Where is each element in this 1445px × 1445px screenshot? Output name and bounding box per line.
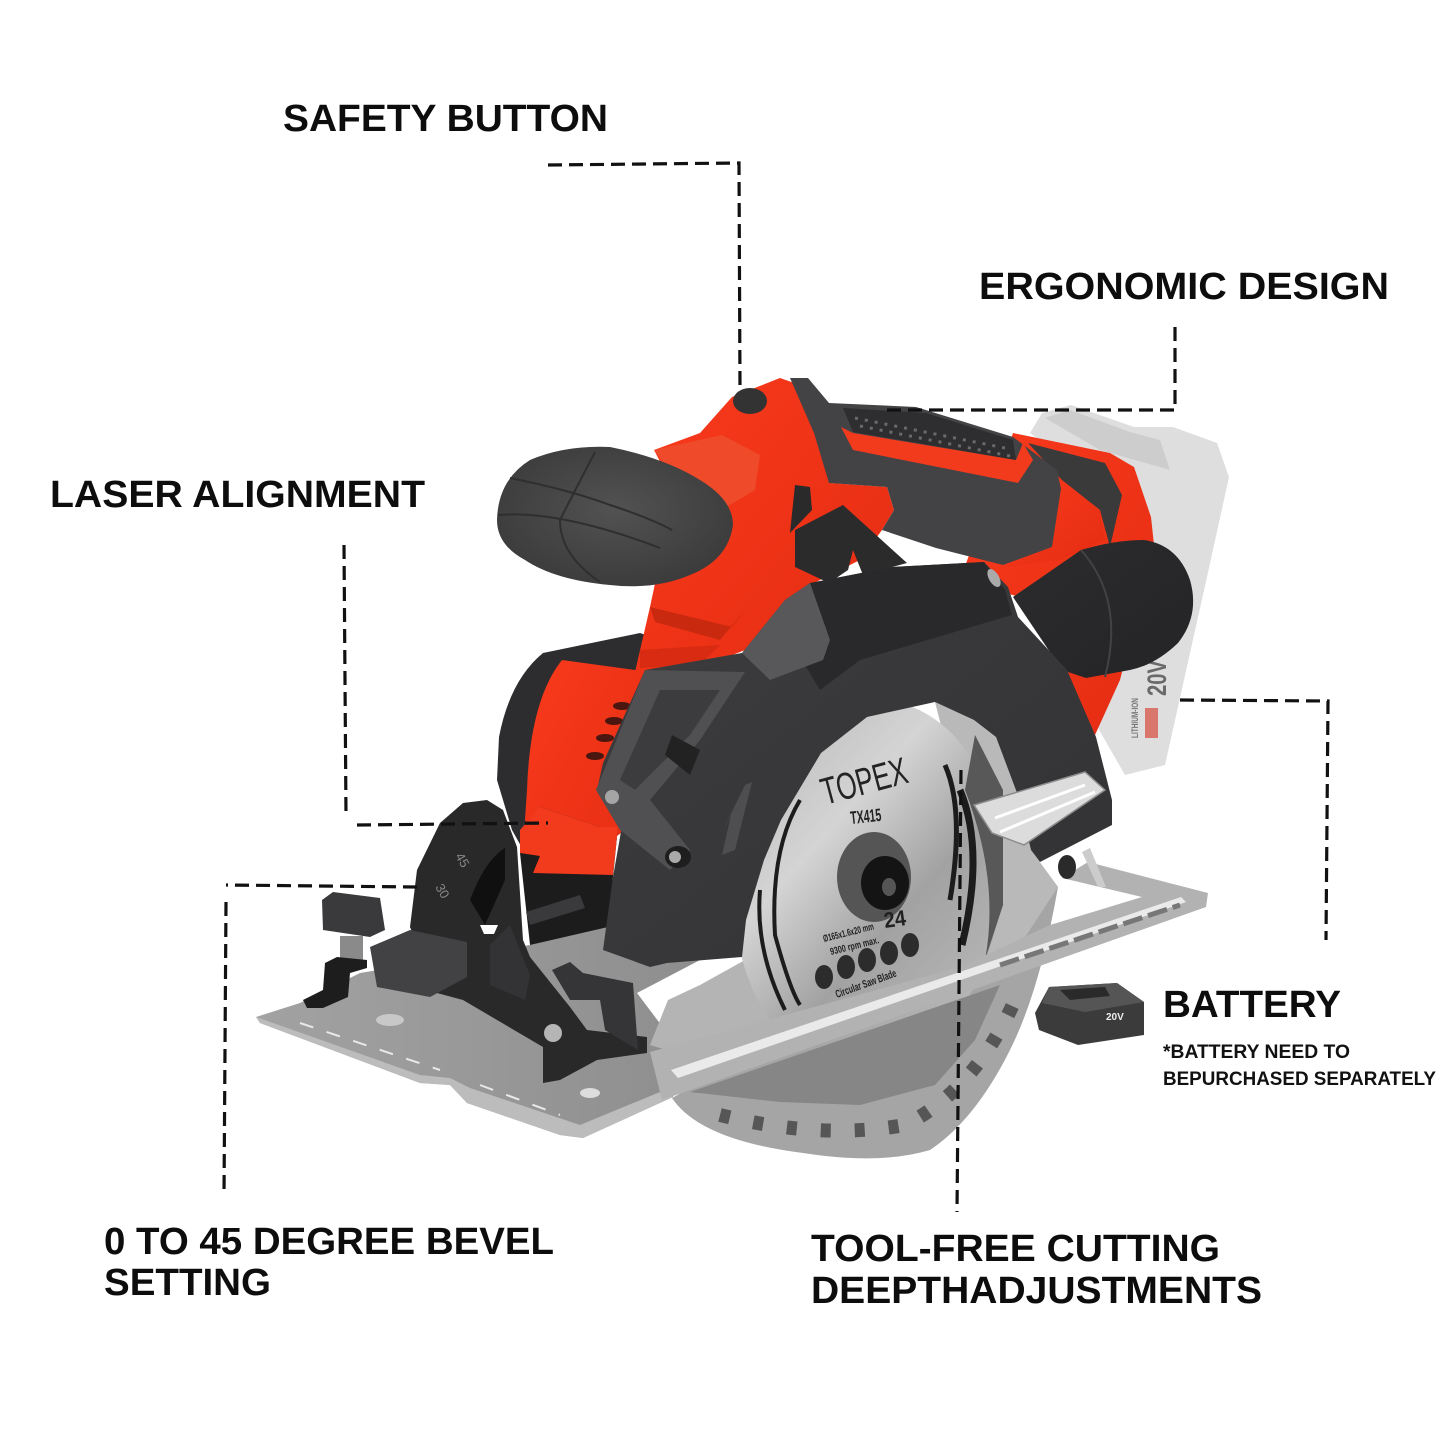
base plate bbox=[256, 925, 700, 1138]
heading: cutting depth bbox=[811, 1228, 1262, 1312]
blade rpm: 9300 rpm max. bbox=[829, 935, 880, 958]
red column and neck bbox=[635, 378, 894, 672]
retract lever bbox=[650, 960, 790, 1060]
battery note: *BATTERY NEED TO bbox=[1163, 1042, 1350, 1063]
battery note bbox=[1163, 1042, 1436, 1090]
product: circular saw bbox=[256, 378, 1229, 1158]
leader: battery bbox=[1180, 700, 1328, 940]
trigger bracket bbox=[790, 485, 907, 583]
safety button bbox=[733, 388, 767, 414]
icon: battery bbox=[1035, 983, 1144, 1045]
leader: safety button bbox=[548, 163, 740, 390]
depth clip bbox=[974, 772, 1105, 845]
blade spec: Ø165x1.6x20 mm bbox=[822, 922, 875, 945]
heading: bevel setting bbox=[104, 1221, 554, 1304]
bevel adjuster bbox=[303, 800, 647, 1083]
blade brand: TOPEX bbox=[816, 750, 912, 814]
blade model: TX415 bbox=[849, 805, 882, 828]
heading: bevel setting: 0 TO 45 DEGREE BEVEL bbox=[104, 1221, 554, 1263]
heading: ergonomic design: ERGONOMIC DESIGN bbox=[979, 266, 1389, 308]
embossed number 1 bbox=[722, 782, 752, 855]
bevel scale 45: 45 bbox=[452, 850, 473, 870]
blade seen through lower guard bbox=[690, 985, 1000, 1105]
blade icons bbox=[815, 933, 919, 989]
bevel scale 30: 30 bbox=[432, 881, 453, 901]
dust port bbox=[1013, 540, 1193, 678]
blade caption: Circular Saw Blade bbox=[834, 968, 898, 1001]
battery pack (ghosted): LITHIUM-ION bbox=[1130, 698, 1140, 738]
rear red housing bbox=[960, 433, 1154, 735]
heading: safety button: SAFETY BUTTON bbox=[283, 98, 608, 140]
heading: bevel setting: SETTING bbox=[104, 1262, 271, 1304]
front knob bbox=[497, 447, 733, 586]
battery note: BEPURCHASED SEPARATELY bbox=[1163, 1069, 1436, 1090]
heading: cutting depth: TOOL-FREE CUTTING bbox=[811, 1228, 1220, 1270]
icon: battery: 20V bbox=[1106, 1012, 1124, 1023]
heading: cutting depth: DEEPTHADJUSTMENTS bbox=[811, 1270, 1262, 1312]
leader: ergonomic design bbox=[880, 327, 1175, 410]
red lower motor bbox=[520, 807, 618, 875]
battery pack (ghosted) bbox=[1030, 405, 1229, 775]
leader: laser alignment bbox=[344, 545, 548, 825]
leader: cutting depth bbox=[957, 770, 961, 1212]
upper blade guard bbox=[596, 562, 1112, 967]
handle grip bbox=[790, 378, 1105, 568]
ruler rail bbox=[650, 848, 1208, 1100]
heading: laser alignment: LASER ALIGNMENT bbox=[50, 474, 425, 516]
saw blade bbox=[716, 687, 1020, 1083]
battery pack (ghosted): 20V bbox=[1142, 660, 1172, 696]
blade teeth: 24 bbox=[882, 905, 908, 933]
lower transparent blade guard bbox=[672, 860, 1058, 1158]
depth slot bbox=[526, 895, 585, 925]
heading: battery: BATTERY bbox=[1163, 984, 1341, 1026]
arbor bbox=[837, 832, 911, 922]
slot plate behind bevel bbox=[520, 807, 618, 945]
leader: bevel setting bbox=[224, 885, 417, 1196]
backing behind blade bbox=[935, 702, 1058, 960]
motor housing bbox=[497, 633, 660, 888]
